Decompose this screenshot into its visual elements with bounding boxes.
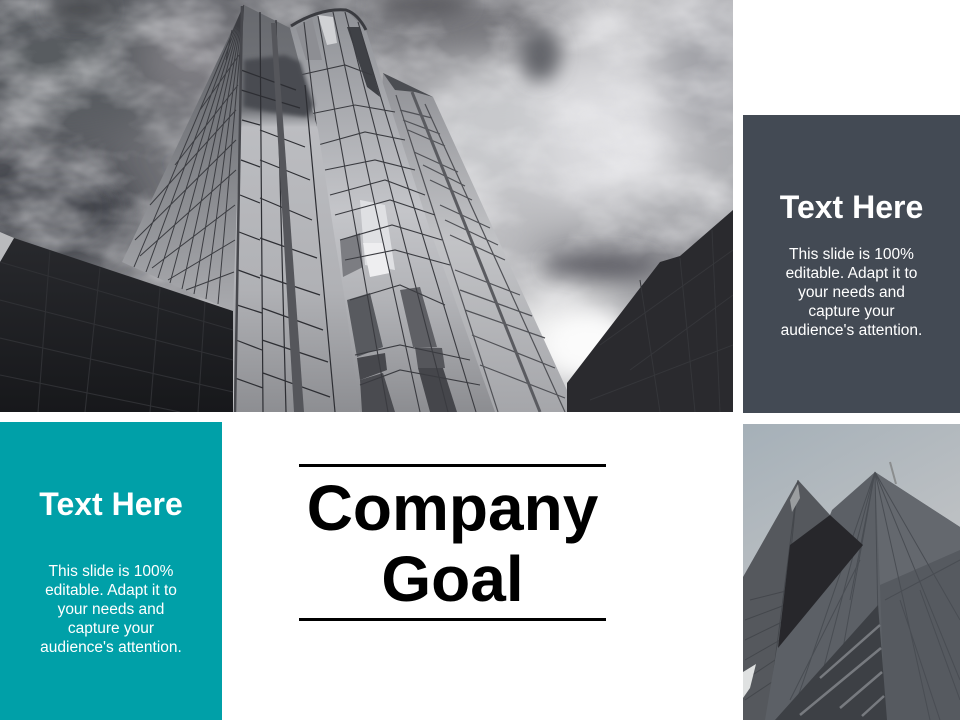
lower floors with windows — [775, 605, 887, 720]
sky and clouds — [0, 0, 750, 412]
building: left face — [122, 5, 244, 312]
main tower — [765, 472, 960, 720]
left dark low building — [0, 232, 233, 412]
left tower — [743, 480, 830, 720]
antenna — [890, 462, 896, 484]
text block: dark card body: capture your — [808, 303, 895, 320]
building: curved central facade — [290, 10, 495, 412]
text block: teal card body: capture your — [68, 620, 154, 637]
text block: dark card body: editable. Adapt it to — [786, 265, 917, 282]
text block: teal card body: audience's attention. — [40, 639, 182, 656]
text block: teal card body: This slide is 100% — [49, 563, 173, 580]
heading: Text Here: Text Here — [39, 486, 183, 522]
text block: dark card body: This slide is 100% — [789, 246, 914, 263]
photo: office tower against cloudy sky — [0, 0, 733, 412]
text block: dark card body: audience's attention. — [781, 322, 922, 339]
building: right wing — [380, 73, 577, 412]
building: main flat facade — [233, 5, 360, 412]
text block: teal card body — [40, 563, 182, 656]
dark glass pane — [778, 515, 863, 648]
title: Company Goal with rules: Goal — [381, 543, 524, 615]
panel: dark text card — [743, 115, 960, 413]
text block: teal card body: editable. Adapt it to — [45, 582, 177, 599]
panel: teal text card — [0, 422, 222, 720]
title: Company Goal with rules — [299, 464, 606, 621]
text block: teal card body: your needs and — [58, 601, 164, 618]
text block: dark card body — [781, 246, 922, 339]
photo: skyscraper peaks — [743, 424, 960, 720]
text block: dark card body: your needs and — [798, 284, 905, 301]
title: Company Goal with rules: Company — [307, 472, 598, 544]
heading: Text Here: Text Here — [780, 189, 923, 225]
right dark low building — [567, 210, 733, 412]
